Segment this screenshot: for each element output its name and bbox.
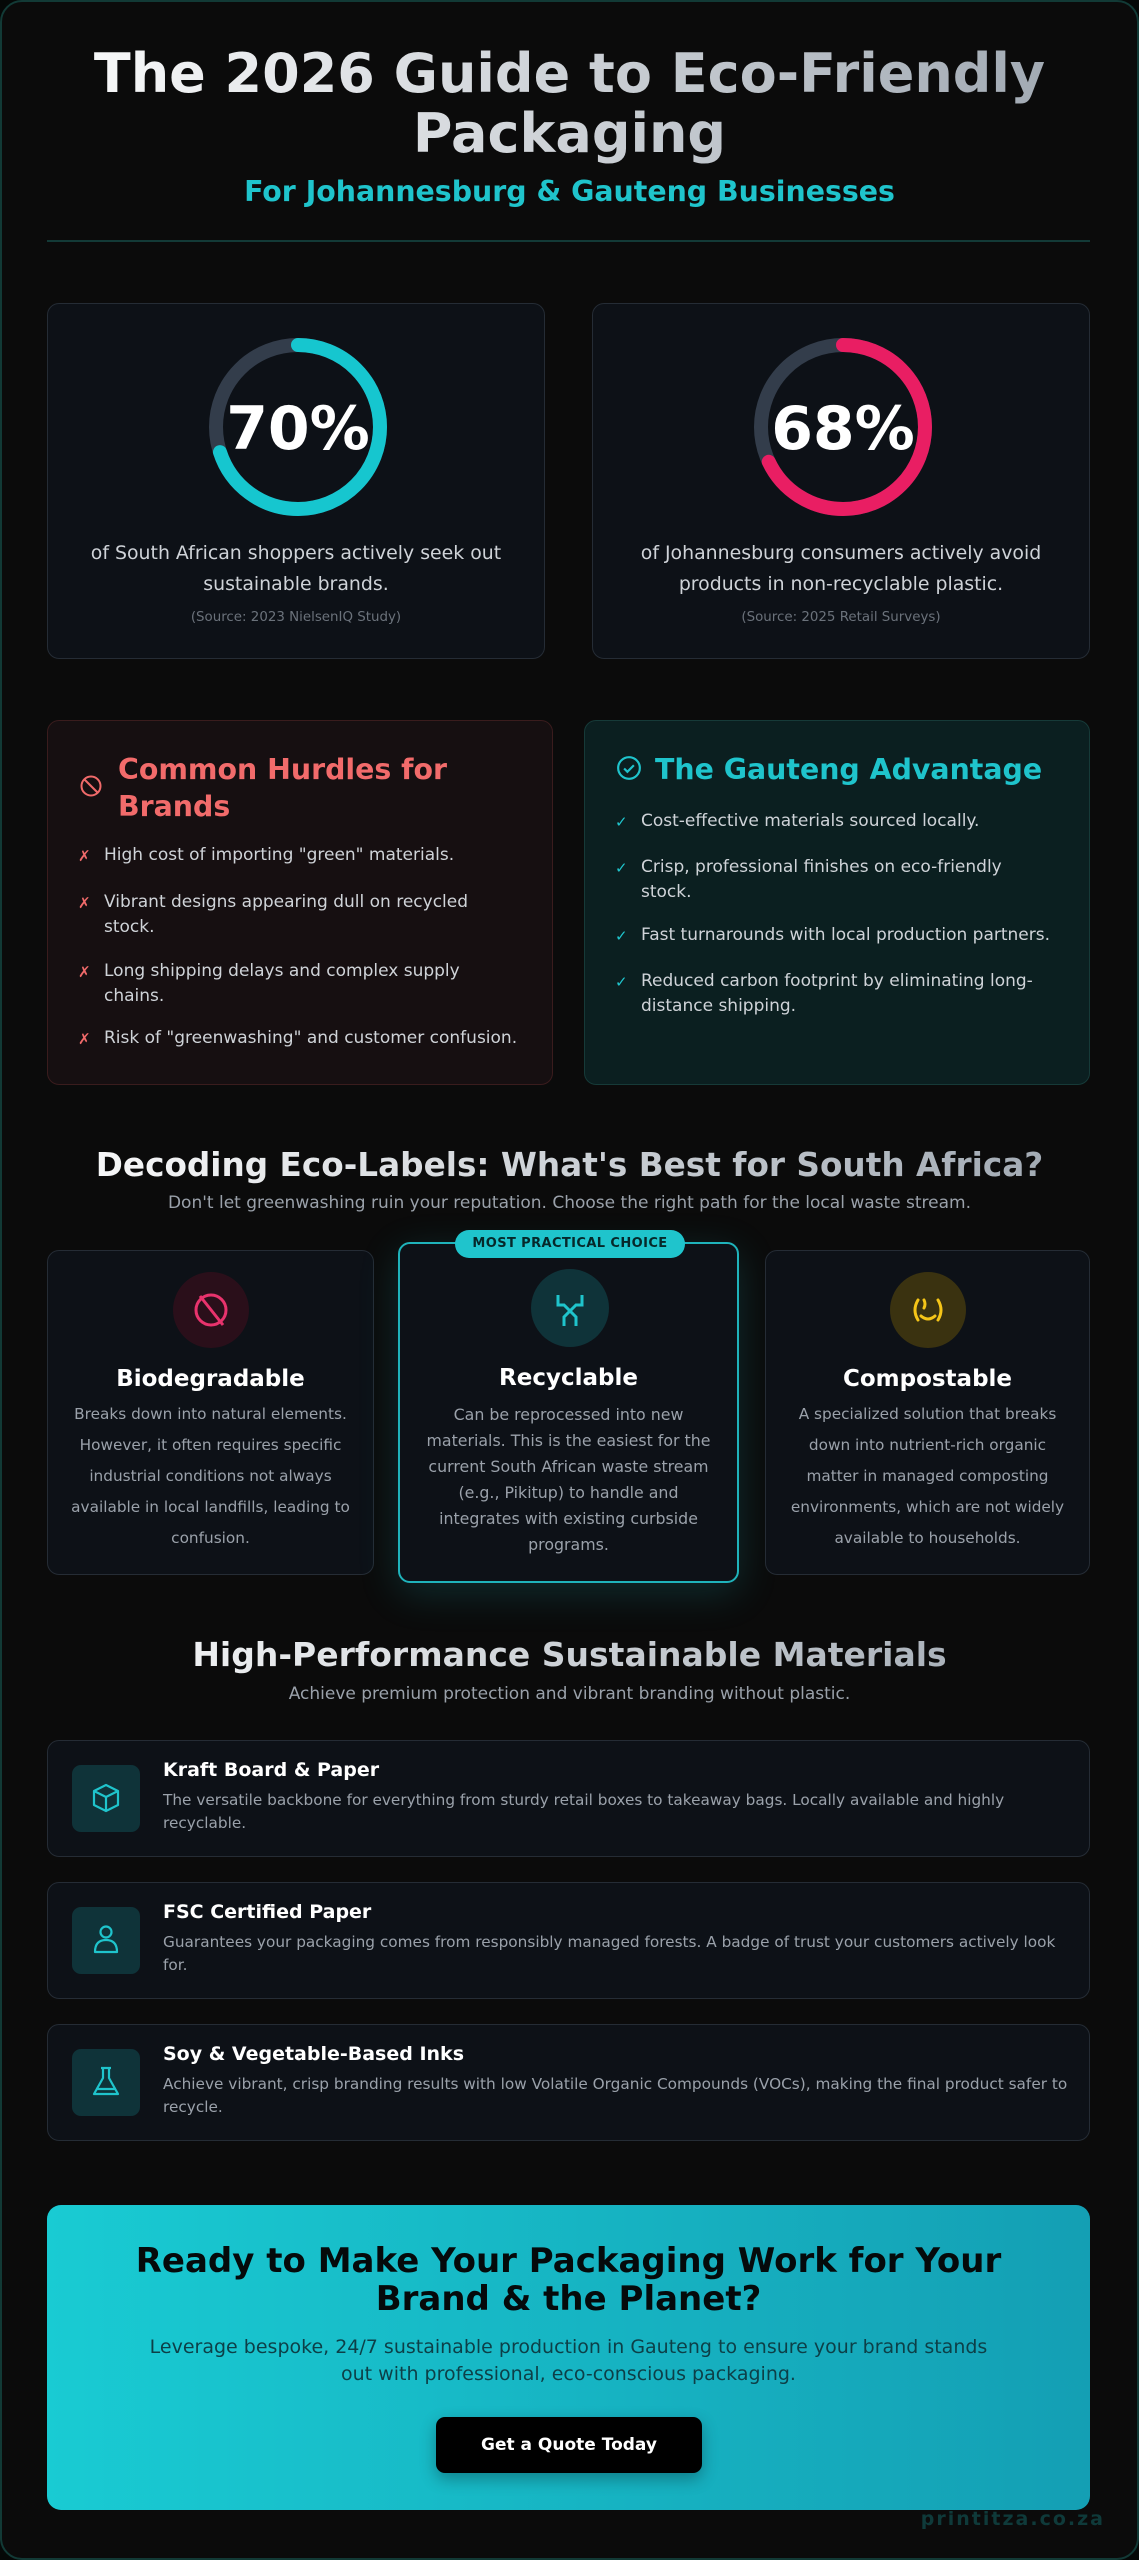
donut chart 68%: 68% bbox=[771, 394, 915, 464]
cta heading: Ready to Make Your Packaging Work for Your bbox=[136, 2241, 1001, 2281]
stat text bbox=[91, 542, 501, 595]
title bbox=[0, 44, 1139, 164]
card: biodegradable: Biodegradable bbox=[116, 1366, 305, 1392]
panel: gauteng advantage: Cost-effective materials sourced locally. bbox=[641, 811, 979, 831]
icon: compostable bbox=[890, 1272, 966, 1348]
panel: common hurdles: ✗ bbox=[78, 847, 91, 865]
heading: Brands bbox=[118, 790, 230, 823]
cta heading bbox=[136, 2241, 1002, 2319]
panel: gauteng advantage bbox=[584, 720, 1090, 1085]
cta text: out with professional, eco-conscious packaging. bbox=[341, 2363, 796, 2385]
material: soy inks bbox=[47, 2024, 1090, 2141]
button bbox=[436, 2417, 702, 2473]
icon: prohibited bbox=[80, 776, 102, 796]
panel: stat 70%: (Source: 2023 NielsenIQ Study) bbox=[191, 610, 401, 625]
panel: gauteng advantage: Reduced carbon footprint by eliminating long-distance shipping. bbox=[641, 971, 1033, 1016]
material: fsc paper bbox=[47, 1882, 1090, 1999]
button: Get a Quote Today bbox=[481, 2435, 657, 2455]
panel: common hurdles: ✗ bbox=[78, 963, 91, 981]
heading: materials bbox=[0, 1635, 1139, 1674]
card: recyclable (highlighted) bbox=[398, 1242, 739, 1583]
panel: stat 70% bbox=[47, 303, 545, 659]
material: soy inks: Achieve vibrant, crisp branding results with low Volatile Organic Compounds (VOCs), making the final product safer to recycle. bbox=[163, 2075, 1067, 2116]
panel: gauteng advantage: ✓ bbox=[615, 813, 628, 831]
card: recyclable (highlighted): Can be reprocessed into new materials. This is the easiest for the current South African waste stream (e.g., Pikitup) to handle and integrates with existing curbside programs. bbox=[427, 1405, 710, 1554]
cta heading: Brand & the Planet? bbox=[376, 2279, 761, 2319]
heading: decoding eco-labels: Decoding Eco-Labels: What's Best for South Africa? bbox=[96, 1146, 1043, 1184]
heading: The Gauteng Advantage bbox=[655, 753, 1042, 786]
icon: check circle bbox=[617, 756, 641, 780]
footer brand: printitza.co.za bbox=[921, 2508, 1105, 2530]
panel: gauteng advantage: Fast turnarounds with local production partners. bbox=[641, 925, 1050, 945]
stat text: of Johannesburg consumers actively avoid bbox=[641, 542, 1041, 564]
donut chart 70%: 70% bbox=[226, 394, 370, 464]
donut chart 68% bbox=[754, 338, 932, 516]
panel: stat 68%: (Source: 2025 Retail Surveys) bbox=[741, 610, 941, 625]
stat text: products in non-recyclable plastic. bbox=[679, 573, 1003, 595]
subtitle: For Johannesburg & Gauteng Businesses bbox=[244, 175, 895, 208]
icon: box bbox=[72, 1765, 140, 1832]
panel: common hurdles bbox=[47, 720, 553, 1085]
badge: most practical choice bbox=[455, 1230, 685, 1258]
panel: common hurdles: Long shipping delays and complex supply chains. bbox=[104, 961, 460, 1006]
stat text bbox=[641, 542, 1041, 595]
title: The 2026 Guide to Eco-Friendly bbox=[94, 42, 1045, 105]
panel: stat 68% bbox=[592, 303, 1090, 659]
panel: common hurdles: ✗ bbox=[78, 1030, 91, 1048]
card: compostable bbox=[765, 1250, 1090, 1575]
card: biodegradable bbox=[47, 1250, 374, 1575]
heading: Common Hurdles for bbox=[118, 753, 447, 786]
panel: common hurdles: Risk of "greenwashing" and customer confusion. bbox=[104, 1028, 517, 1048]
icon: recycle bbox=[531, 1269, 609, 1347]
subheading: Achieve premium protection and vibrant branding without plastic. bbox=[289, 1684, 850, 1704]
panel: gauteng advantage: Crisp, professional finishes on eco-friendly stock. bbox=[641, 857, 1002, 902]
card: biodegradable: Breaks down into natural elements. However, it often requires specific industrial conditions not always available in local landfills, leading to confusion. bbox=[71, 1405, 350, 1547]
donut chart 70% bbox=[209, 338, 387, 516]
badge: most practical choice: MOST PRACTICAL CHOICE bbox=[472, 1236, 668, 1251]
cta text bbox=[150, 2336, 987, 2385]
panel: gauteng advantage: ✓ bbox=[615, 927, 628, 945]
cta text: Leverage bespoke, 24/7 sustainable production in Gauteng to ensure your brand stands bbox=[150, 2336, 987, 2358]
panel: common hurdles: High cost of importing "green" materials. bbox=[104, 845, 454, 865]
material: fsc paper: FSC Certified Paper bbox=[163, 1901, 371, 1923]
panel: common hurdles: Vibrant designs appearing dull on recycled stock. bbox=[104, 892, 468, 937]
card: compostable: Compostable bbox=[843, 1366, 1012, 1392]
heading bbox=[118, 753, 447, 823]
heading: materials: High-Performance Sustainable Materials bbox=[192, 1635, 947, 1674]
icon: person bbox=[72, 1907, 140, 1974]
stat text: of South African shoppers actively seek out bbox=[91, 542, 501, 564]
material: soy inks: Soy & Vegetable-Based Inks bbox=[163, 2043, 464, 2065]
title: Packaging bbox=[413, 102, 726, 165]
panel: gauteng advantage: ✓ bbox=[615, 859, 628, 877]
panel: gauteng advantage: ✓ bbox=[615, 973, 628, 991]
material: kraft board bbox=[47, 1740, 1090, 1857]
material: kraft board: Kraft Board & Paper bbox=[163, 1759, 379, 1781]
stat text: sustainable brands. bbox=[203, 573, 389, 595]
cta panel bbox=[47, 2205, 1090, 2510]
icon: biodegradable bbox=[173, 1272, 249, 1348]
material: fsc paper: Guarantees your packaging comes from responsibly managed forests. A badge of trust your customers actively look for. bbox=[163, 1933, 1055, 1974]
card: recyclable (highlighted): Recyclable bbox=[499, 1365, 638, 1391]
panel: common hurdles: ✗ bbox=[78, 894, 91, 912]
card: compostable: A specialized solution that breaks down into nutrient-rich organic matter in managed composting environments, which are not widely available to households. bbox=[791, 1405, 1064, 1547]
subheading: Don't let greenwashing ruin your reputation. Choose the right path for the local waste stream. bbox=[168, 1193, 971, 1213]
icon: flask bbox=[72, 2049, 140, 2116]
material: kraft board: The versatile backbone for everything from sturdy retail boxes to takeaway bags. Locally available and highly recyclable. bbox=[163, 1791, 1004, 1832]
